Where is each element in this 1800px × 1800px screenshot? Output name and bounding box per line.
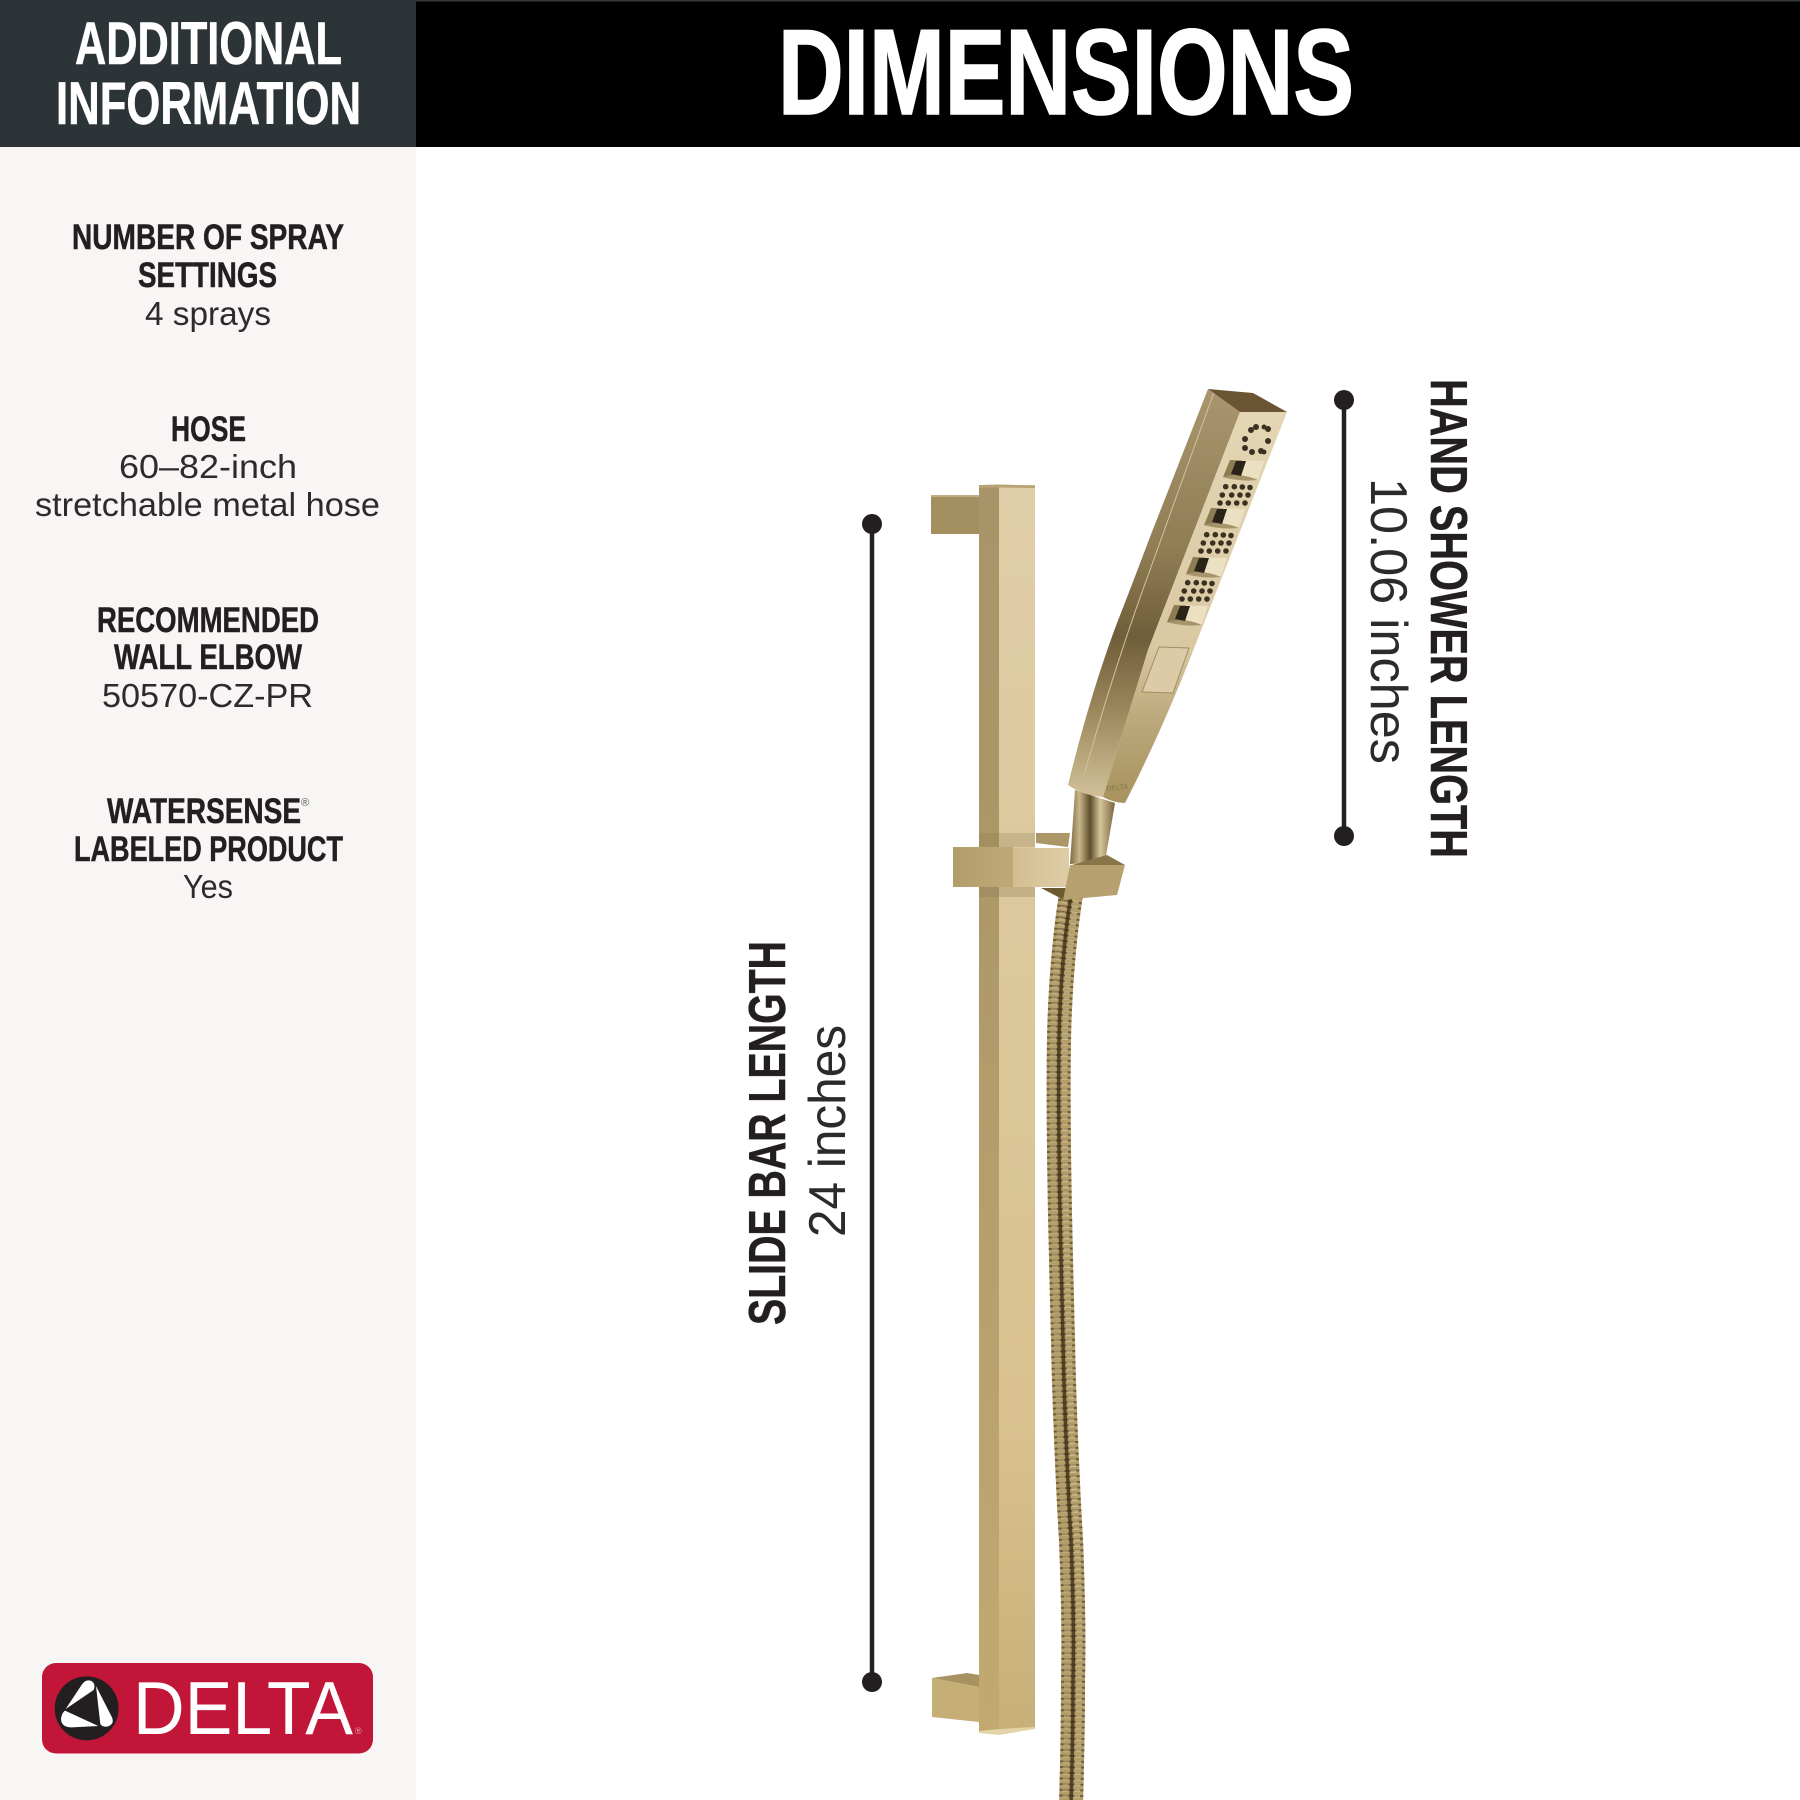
dimension: slide bar length [739,514,882,1692]
slide bar [979,484,1035,1735]
spray slots [1167,460,1264,626]
hose [1053,895,1079,1800]
neck [1070,790,1115,864]
holder clip [1063,855,1125,900]
info: watersense labeled product: LABELED PRODUCT [74,830,343,869]
front face [1103,412,1287,803]
logo: delta: DELTA [133,1666,353,1750]
spray ring [1242,424,1271,455]
heading bar: dimensions: DIMENSIONS [778,4,1354,140]
dimension: hand shower length: HAND SHOWER LENGTH [1419,379,1477,858]
panel: additional information sidebar [0,0,416,1800]
info: hose: stretchable metal hose [35,486,380,523]
dimension: slide bar length: 24 inches [799,1025,857,1237]
hand shower [1068,389,1287,803]
icon: delta tri-wedge mark [55,1676,119,1740]
sidebar header [0,0,416,147]
logo: delta: ® [355,1726,362,1736]
info: number of spray settings [72,218,344,332]
info: watersense labeled product: ® [301,797,309,809]
info: number of spray settings: NUMBER OF SPRAY [72,218,344,257]
bottom wall bracket [932,1673,979,1722]
info: hose: 60–82-inch [119,448,297,485]
slider block [953,847,1069,887]
handle engraving: DELTA [1106,783,1129,793]
info: hose: HOSE [171,410,246,449]
info: watersense labeled product: WATERSENSE [107,792,301,831]
button [1142,647,1189,693]
dimension: hand shower length: 10.06 inches [1359,478,1417,764]
info: recommended wall elbow [97,601,319,714]
dimension: slide bar length: SLIDE BAR LENGTH [739,941,797,1325]
info: recommended wall elbow: RECOMMENDED [97,601,319,640]
product: slide bar with hand shower [931,389,1287,1800]
heading bar: dimensions [416,0,1800,147]
highlight line [1084,392,1214,775]
top cap [1208,389,1287,412]
info: watersense labeled product: Yes [183,868,233,905]
info: recommended wall elbow: 50570-CZ-PR [102,677,313,714]
clip back plates [1036,833,1070,900]
dimension: hand shower length [1334,379,1477,858]
info: recommended wall elbow: WALL ELBOW [114,638,302,677]
logo: delta [42,1663,373,1754]
sidebar header: ADDITIONAL [75,10,342,77]
info: number of spray settings: SETTINGS [138,256,277,295]
top wall bracket [931,495,979,534]
info: watersense labeled product [74,792,343,905]
info: number of spray settings: 4 sprays [145,295,271,332]
info: hose [35,410,380,523]
side face [1068,389,1240,797]
nozzle grids [1179,484,1253,602]
sidebar header: INFORMATION [56,70,361,137]
